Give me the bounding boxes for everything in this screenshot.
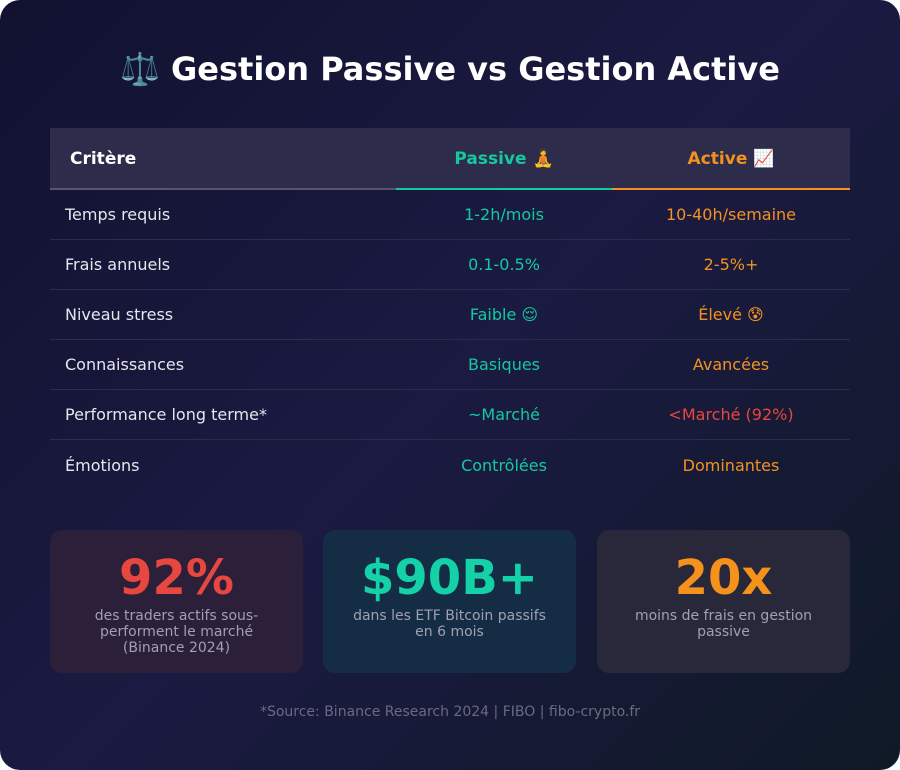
stat card: 92%: 92% xyxy=(119,550,234,606)
stat card: $90B+ xyxy=(323,530,576,673)
stat card: 92%: des traders actifs sous-performent le marché (Binance 2024) xyxy=(95,608,258,656)
row: performance xyxy=(50,390,850,440)
row: temps xyxy=(50,190,850,240)
row: temps: Temps requis xyxy=(65,205,170,224)
stat card: 20x: 20x xyxy=(675,550,772,606)
table header xyxy=(50,128,850,190)
table header: Critère xyxy=(70,149,136,169)
row: frais: 2-5%+ xyxy=(704,255,758,274)
row: stress xyxy=(50,290,850,340)
table header: Active 📈 xyxy=(688,149,774,169)
row: performance: <Marché (92%) xyxy=(668,405,794,424)
row: emotions: Émotions xyxy=(65,456,139,474)
stat card: $90B+: dans les ETF Bitcoin passifs en 6 mois xyxy=(353,608,546,640)
row: connaissances: Avancées xyxy=(693,355,769,374)
title: ⚖️ Gestion Passive vs Gestion Active xyxy=(120,50,780,88)
row: stress: Faible 😌 xyxy=(470,305,538,324)
row: emotions xyxy=(65,456,779,474)
row: frais: Frais annuels xyxy=(65,255,170,274)
row: temps: 10-40h/semaine xyxy=(666,205,796,224)
row: frais: 0.1-0.5% xyxy=(468,255,540,274)
stat card: 92% xyxy=(50,530,303,673)
comparison table xyxy=(50,128,850,474)
row: stress: Élevé 😰 xyxy=(698,305,764,324)
row: connaissances xyxy=(50,340,850,390)
row: performance: Performance long terme* xyxy=(65,405,267,424)
table header: Passive 🧘 xyxy=(454,149,554,169)
stat card: 20x: moins de frais en gestion passive xyxy=(635,608,812,640)
footer source: *Source: Binance Research 2024 | FIBO | fibo-crypto.fr xyxy=(260,704,640,720)
row: temps: 1-2h/mois xyxy=(464,205,544,224)
stat card: 20x xyxy=(597,530,850,673)
stat card: $90B+: $90B+ xyxy=(361,550,538,606)
row: emotions: Dominantes xyxy=(683,456,779,474)
row: frais xyxy=(50,240,850,290)
row: connaissances: Connaissances xyxy=(65,355,184,374)
row: emotions: Contrôlées xyxy=(461,456,547,474)
row: connaissances: Basiques xyxy=(468,355,540,374)
row: performance: ~Marché xyxy=(468,405,540,424)
row: stress: Niveau stress xyxy=(65,305,173,324)
